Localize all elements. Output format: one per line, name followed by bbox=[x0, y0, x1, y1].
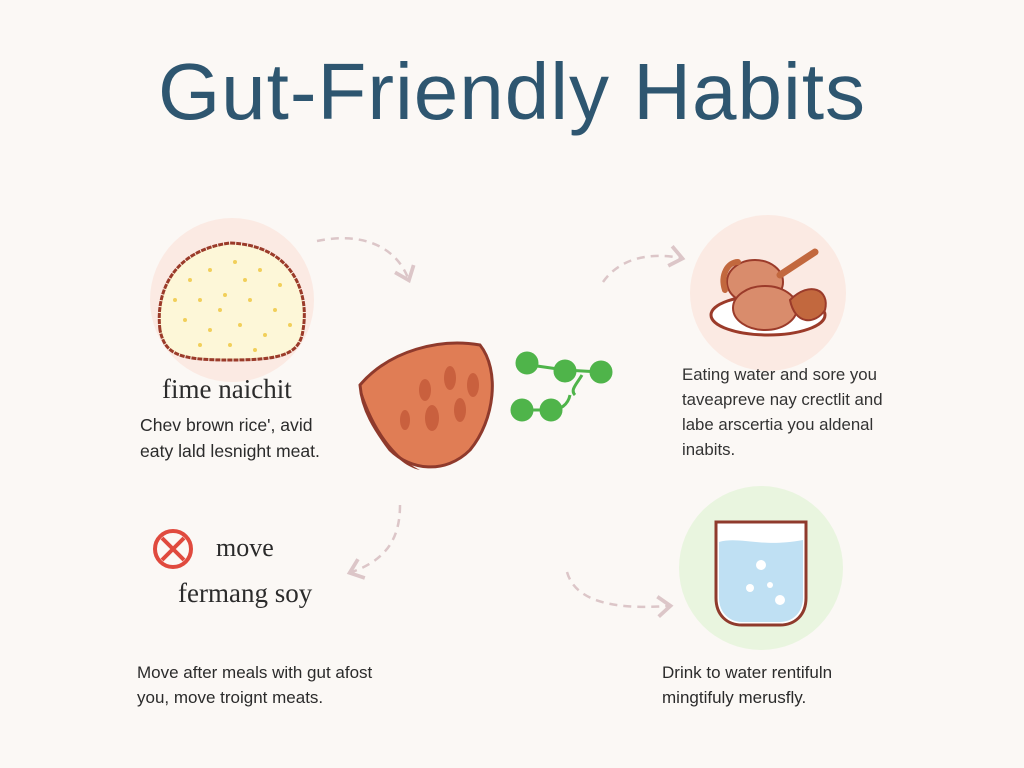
text: rice bbox=[140, 415, 320, 461]
text: water bbox=[662, 663, 832, 707]
text: rice: eaty lald lesnight meat. bbox=[140, 441, 320, 461]
text: move bbox=[137, 663, 372, 707]
heading: fermang: fermang soy bbox=[178, 578, 312, 608]
text: meat: labe arscertia you aldenal bbox=[682, 415, 873, 434]
text: meat bbox=[682, 365, 883, 459]
arrow: bottom-right bbox=[567, 572, 668, 607]
icon: green dots bbox=[511, 352, 612, 421]
heading: move: move bbox=[216, 533, 274, 562]
icon: water glass bbox=[679, 486, 843, 650]
text: rice: Chev brown rice', avid bbox=[140, 415, 313, 435]
icon: no sign bbox=[155, 531, 191, 567]
icon: rice bbox=[150, 218, 314, 382]
arrow: bottom-left bbox=[352, 505, 400, 572]
heading: rice: fime naichit bbox=[162, 374, 292, 404]
title: Gut-Friendly Habits bbox=[158, 47, 866, 136]
text: move: Move after meals with gut afost bbox=[137, 663, 372, 682]
icon: meat plate bbox=[690, 215, 846, 371]
text: meat: taveapreve nay crectlit and bbox=[682, 390, 883, 409]
text: move: you, move troignt meats. bbox=[137, 688, 323, 707]
arrow: top-left bbox=[317, 238, 408, 278]
text: meat: inabits. bbox=[682, 440, 735, 459]
arrow: top-right bbox=[603, 256, 680, 282]
text: water: mingtifuly merusfly. bbox=[662, 688, 806, 707]
text: water: Drink to water rentifuln bbox=[662, 663, 832, 682]
text: meat: Eating water and sore you bbox=[682, 365, 877, 384]
icon: sweet potato bbox=[360, 343, 492, 470]
